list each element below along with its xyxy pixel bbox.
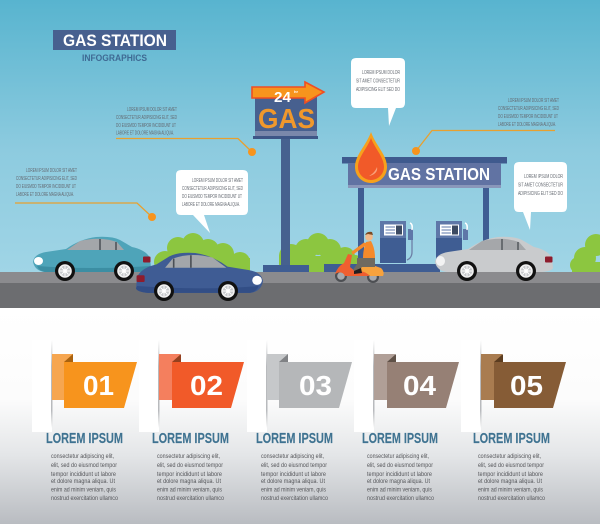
heading: LOREM IPSUM <box>46 431 123 447</box>
platform <box>324 264 440 272</box>
body copy: tempor incididunt ut labore <box>51 471 116 478</box>
speech bubble 2 <box>351 58 405 126</box>
speech bubble 2: LOREM IPSUM DOLOR <box>362 70 400 76</box>
body copy: consectetur adipiscing elit, <box>157 453 220 460</box>
step 5 <box>461 340 566 502</box>
body copy: consectetur adipiscing elit, <box>478 453 541 460</box>
road <box>0 272 600 308</box>
speech bubble 1: CONSECTETUR ADIPISICING ELIT, SED <box>182 186 243 192</box>
body copy: nostrud exercitation ullamco <box>367 495 434 502</box>
body copy: tempor incididunt ut labore <box>367 471 432 478</box>
teal car <box>33 237 151 281</box>
scooter and rider <box>335 232 384 283</box>
fascia <box>348 163 501 185</box>
sign board <box>255 97 317 133</box>
speech bubble 3: ADIPISICING ELIT SED DO <box>518 191 563 197</box>
body copy: consectetur adipiscing elit, <box>51 453 114 460</box>
fuel drop icon <box>355 132 387 183</box>
GAS label: GAS <box>258 103 315 134</box>
body copy: et dolore magna aliqua. Ut <box>367 478 430 485</box>
body copy: et dolore magna aliqua. Ut <box>51 478 115 485</box>
body copy <box>367 453 434 502</box>
roof <box>342 157 507 164</box>
rider head <box>365 233 373 241</box>
ribbon <box>159 354 180 400</box>
body copy: et dolore magna aliqua. Ut <box>157 478 221 485</box>
annotation text 2: LABORE ET DOLORE MAGNA ALIQUA. <box>16 192 74 198</box>
annotation text 3: LABORE ET DOLORE MAGNA ALIQUA. <box>498 122 556 128</box>
ribbon <box>481 354 502 400</box>
scooter body <box>335 254 369 276</box>
body copy <box>51 453 118 502</box>
body copy: elit, sed do eiusmod tempor <box>51 462 118 469</box>
annotation text 3: DO EIUSMOD TEMPOR INCIDIDUNT UT <box>498 114 558 120</box>
number: 03 <box>299 370 332 401</box>
grey car <box>435 237 553 281</box>
24hr label: 24 <box>274 89 292 106</box>
speech bubble 1: LOREM IPSUM DOLOR SIT AMET <box>192 178 243 184</box>
speech bubble 1: LABORE ET DOLORE MAGNA ALIQUA. <box>182 202 240 208</box>
annotation text 1: DO EIUSMOD TEMPOR INCIDIDUNT UT <box>116 123 176 129</box>
body copy: nostrud exercitation ullamco <box>157 495 224 502</box>
step 4 <box>354 340 459 502</box>
fuel pump 2 <box>436 221 468 263</box>
blue car <box>136 253 263 301</box>
annotation text 2 <box>16 168 77 198</box>
bush middle <box>279 233 363 272</box>
annotation text 3: CONSECTETUR ADIPISICING ELIT, SED <box>498 106 559 112</box>
ribbon <box>374 354 395 400</box>
body copy: elit, sed do eiusmod tempor <box>478 462 545 469</box>
body copy: enim ad minim veniam, quis <box>157 486 223 494</box>
body copy: enim ad minim veniam, quis <box>51 486 117 494</box>
body copy: et dolore magna aliqua. Ut <box>261 478 325 485</box>
fuel pump 1 <box>380 221 413 263</box>
annotation text 1: LABORE ET DOLORE MAGNA ALIQUA. <box>116 130 174 136</box>
speech bubble 1 <box>176 170 248 233</box>
annotation text 3 <box>498 98 559 128</box>
step 3 <box>247 340 352 502</box>
speech bubble 3 <box>514 162 567 230</box>
number: 04 <box>403 370 437 401</box>
body copy: enim ad minim veniam, quis <box>261 486 327 494</box>
body copy: nostrud exercitation ullamco <box>478 495 545 502</box>
arrow <box>252 82 324 103</box>
heading: LOREM IPSUM <box>256 431 333 447</box>
body copy: enim ad minim veniam, quis <box>367 486 433 494</box>
annotation text 3: LOREM IPSUM DOLOR SIT AMET <box>508 98 559 104</box>
lower panel background <box>0 308 600 524</box>
speech bubble 1: DO EIUSMOD TEMPOR INCIDIDUNT UT <box>182 194 242 200</box>
step 1 <box>32 340 137 502</box>
body copy: et dolore magna aliqua. Ut <box>478 478 542 485</box>
ribbon <box>267 354 288 400</box>
body copy: tempor incididunt ut labore <box>157 471 222 478</box>
heading: LOREM IPSUM <box>473 431 550 447</box>
scooter wheels <box>335 270 347 282</box>
leader line 1 <box>116 138 256 156</box>
bush left <box>154 233 250 273</box>
speech bubble 2: SIT AMET CONSECTETUR <box>356 78 400 84</box>
body copy: tempor incididunt ut labore <box>261 471 326 478</box>
heading: LOREM IPSUM <box>152 431 229 447</box>
title banner: GAS STATION <box>63 31 167 50</box>
body copy <box>478 453 545 502</box>
rider legs <box>353 258 375 272</box>
columns <box>358 187 364 267</box>
body copy: consectetur adipiscing elit, <box>261 453 324 460</box>
annotation text 2: CONSECTETUR ADIPISICING ELIT, SED <box>16 176 77 182</box>
step 2 <box>139 340 244 502</box>
subtitle: INFOGRAPHICS <box>82 53 147 64</box>
body copy <box>261 453 328 502</box>
body copy: tempor incididunt ut labore <box>478 471 543 478</box>
number: 02 <box>190 370 223 401</box>
number: 05 <box>510 370 543 401</box>
gas station canopy <box>342 132 507 267</box>
annotation text 1: CONSECTETUR ADIPISICING ELIT, SED <box>116 115 177 121</box>
body copy: enim ad minim veniam, quis <box>478 486 544 494</box>
body copy: nostrud exercitation ullamco <box>51 495 118 502</box>
speech bubble 3: SIT AMET CONSECTETUR <box>518 182 563 188</box>
leader line 2 <box>15 203 156 221</box>
body copy <box>157 453 224 502</box>
speech bubble 2: ADIPISICING ELIT SED DO <box>356 87 400 93</box>
number: 01 <box>83 370 114 401</box>
sign post <box>281 138 290 266</box>
heading: LOREM IPSUM <box>362 431 438 447</box>
body copy: nostrud exercitation ullamco <box>261 495 328 502</box>
rider torso <box>363 241 375 258</box>
ribbon <box>52 354 73 400</box>
annotation text 2: DO EIUSMOD TEMPOR INCIDIDUNT UT <box>16 184 76 190</box>
sign base <box>263 265 309 272</box>
gas price sign <box>252 82 324 272</box>
sky background <box>0 0 600 273</box>
leader line 3 <box>412 130 555 155</box>
body copy: consectetur adipiscing elit, <box>367 453 429 460</box>
bush right <box>570 234 600 273</box>
annotation text 2: LOREM IPSUM DOLOR SIT AMET <box>26 168 77 174</box>
speech bubble 3: LOREM IPSUM DOLOR <box>524 174 563 180</box>
station name: GAS STATION <box>388 164 490 184</box>
annotation text 1: LOREM IPSUM DOLOR SIT AMET <box>127 107 177 113</box>
body copy: elit, sed do eiusmod tempor <box>367 462 434 469</box>
body copy: elit, sed do eiusmod tempor <box>157 462 224 469</box>
gas price sign: hr <box>294 89 298 94</box>
body copy: elit, sed do eiusmod tempor <box>261 462 328 469</box>
annotation text 1 <box>116 107 177 136</box>
